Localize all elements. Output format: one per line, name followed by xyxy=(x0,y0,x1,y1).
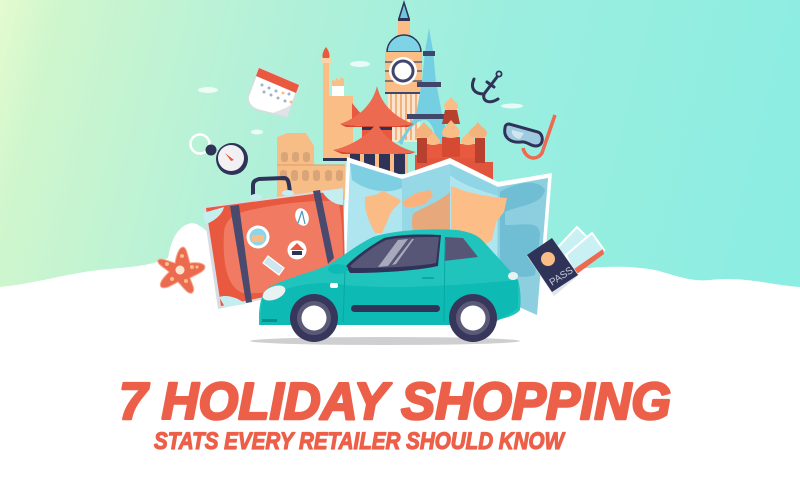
car windows xyxy=(346,234,478,273)
passport and tickets: PASS xyxy=(548,265,576,289)
starfish xyxy=(158,247,205,293)
suitcase xyxy=(203,178,346,309)
landmark: Big Ben xyxy=(385,0,422,142)
title: 7 HOLIDAY SHOPPING xyxy=(119,373,671,431)
passport and tickets xyxy=(527,227,604,296)
landmark: pagoda xyxy=(333,86,416,174)
map xyxy=(340,157,552,322)
rear wheel xyxy=(449,294,497,342)
landmark: Colosseum xyxy=(277,133,345,200)
car shadow xyxy=(250,337,520,345)
landmark: Eiffel tower xyxy=(398,28,450,145)
landmark: tower and castle building xyxy=(321,47,362,161)
subtitle: STATS EVERY RETAILER SHOULD KNOW xyxy=(154,428,566,455)
icon: snorkel mask xyxy=(505,115,555,158)
sky background xyxy=(0,0,800,300)
white snow ground xyxy=(0,223,800,480)
icon: calendar xyxy=(248,68,299,117)
front wheel xyxy=(290,294,338,342)
icon: compass xyxy=(190,134,248,175)
car xyxy=(259,229,521,342)
small clouds xyxy=(198,61,523,134)
landmark: Saint Basil cathedral xyxy=(409,97,493,180)
car door details xyxy=(260,240,518,322)
icon: anchor xyxy=(472,71,502,102)
